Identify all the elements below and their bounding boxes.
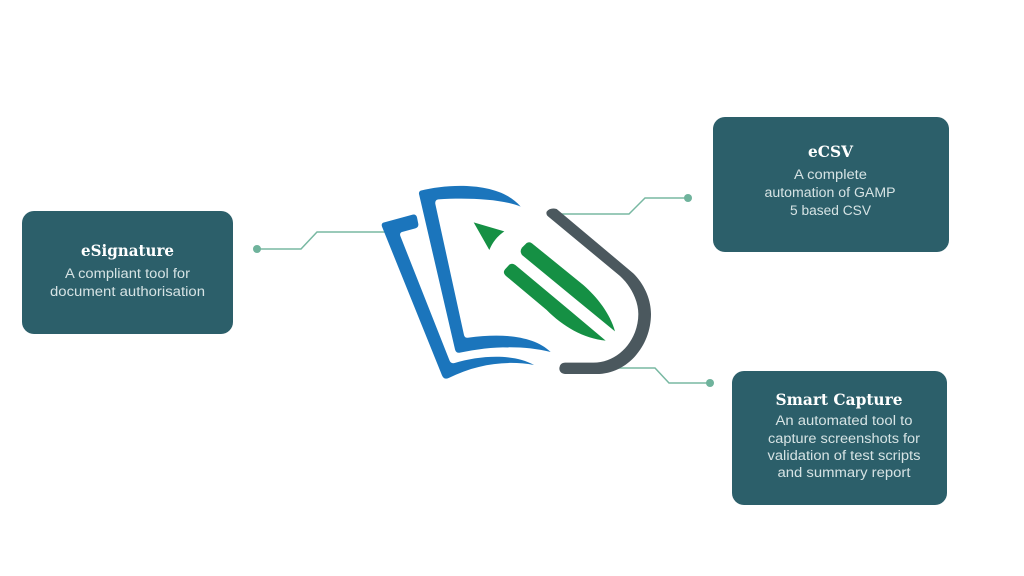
text: eSignature description: [50, 266, 205, 299]
icon: pencil upper stroke: [521, 242, 615, 331]
icon: grey shield outline: [546, 209, 651, 374]
heading: eCSV: eCSV: [808, 142, 854, 161]
connector: Smart Capture: [610, 368, 714, 387]
heading: eSignature: eSignature: [81, 241, 174, 260]
icon: front page: [419, 186, 551, 353]
icon: pencil lower stroke: [504, 264, 606, 341]
icon: pencil tip: [474, 222, 504, 250]
connector: eSignature: [253, 232, 385, 253]
icon: back page: [382, 215, 534, 379]
text: eSignature description: A compliant tool for: [65, 266, 191, 281]
text: Smart Capture description: validation of test scripts: [768, 448, 921, 463]
connector: eCSV: [560, 194, 692, 214]
panel: eSignature: [22, 211, 233, 334]
text: Smart Capture description: [768, 413, 921, 480]
panel: Smart Capture: [732, 371, 947, 505]
logo: [382, 186, 651, 379]
text: Smart Capture description: and summary report: [778, 465, 911, 480]
text: Smart Capture description: An automated tool to: [776, 413, 912, 428]
text: eSignature description: document authorisation: [50, 284, 205, 299]
text: eCSV description: [764, 167, 896, 218]
text: eCSV description: A complete: [794, 167, 867, 182]
heading: Smart Capture: Smart Capture: [776, 390, 903, 409]
panel: eCSV: [713, 117, 949, 252]
text: eCSV description: 5 based CSV: [790, 203, 871, 218]
text: Smart Capture description: capture screenshots for: [768, 431, 921, 446]
text: eCSV description: automation of GAMP: [764, 185, 896, 200]
